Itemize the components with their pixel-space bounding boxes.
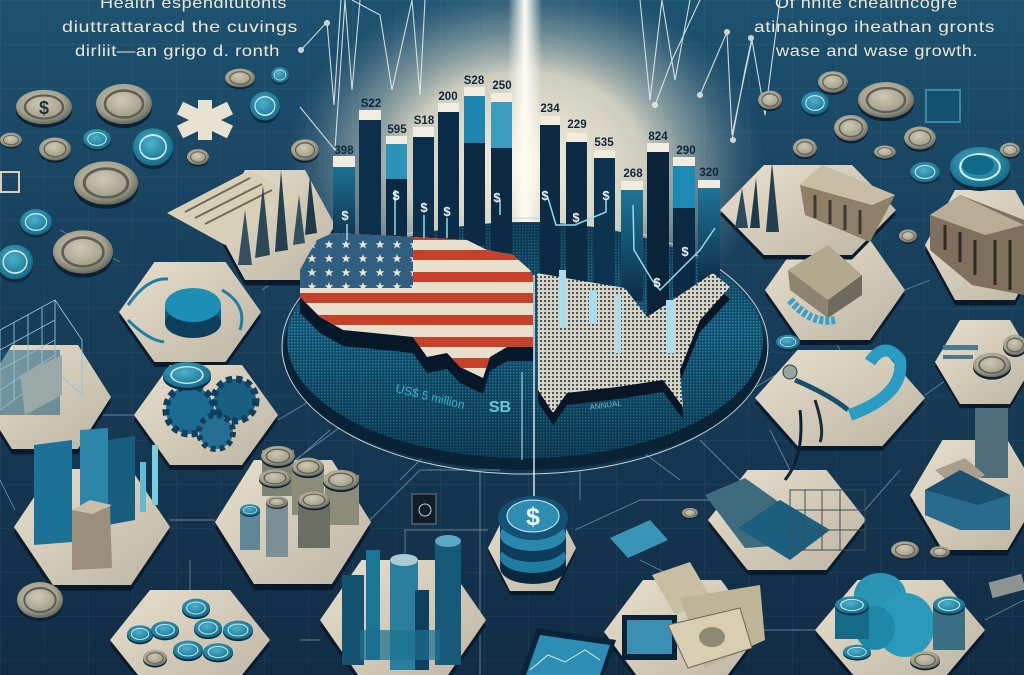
icon: ship and building	[705, 410, 865, 560]
icon: city block right	[925, 408, 1010, 530]
heading: left text block: dirliit—an grigo d. ronth	[75, 43, 280, 60]
icon: dollar coin stack: $	[526, 503, 540, 531]
icon: blue disc on card	[128, 279, 242, 342]
spike line charts above the bars	[298, 0, 780, 150]
trend lines with dollar marks	[341, 188, 715, 290]
bar chart: left group: S28	[464, 75, 485, 87]
disc base: US$ 5 million	[394, 381, 466, 412]
icon: laptop screen bottom	[520, 628, 616, 675]
bar chart: left group: S18	[414, 115, 435, 127]
bar chart: right group: 234	[540, 103, 560, 115]
central light glow	[285, 0, 765, 350]
trend lines with dollar marks: $	[341, 208, 349, 223]
icon: box on card	[788, 245, 862, 321]
bar chart: right group: 290	[676, 145, 696, 157]
bar chart: right group: 824	[648, 131, 668, 143]
heading: right text block: wase and wase growth.	[775, 43, 978, 60]
icon: blue gears	[163, 362, 256, 449]
bar chart: left group: 250	[492, 80, 512, 92]
icon: newspaper and spikes	[167, 170, 317, 265]
icon group: coins upper right	[758, 71, 1020, 351]
trend lines with dollar marks: $	[493, 190, 501, 205]
icon: bottom left coins	[17, 582, 253, 667]
heading: left text block: diuttrattaracd the cuvings	[62, 19, 298, 36]
icon: blue towers bottom centre	[342, 535, 461, 670]
panel: hexagon cards	[0, 165, 1024, 675]
disc base: ANNUAL	[589, 398, 623, 412]
bar chart: right group: 229	[567, 119, 587, 131]
bar chart: right group: 535	[594, 137, 614, 149]
bar chart: right group	[540, 103, 720, 318]
bar chart: left group	[333, 75, 512, 253]
icon: spikes and warehouse upper right	[735, 162, 895, 242]
icon group: coins upper left: $	[39, 98, 49, 118]
trend lines with dollar marks: $	[420, 200, 428, 215]
trend lines with dollar marks: $	[541, 188, 549, 203]
icon: coin stacks	[240, 446, 359, 557]
icon: glass towers	[34, 428, 158, 570]
bar chart: left group: 595	[387, 124, 407, 136]
icon: coins right card	[943, 335, 1024, 380]
trend lines with dollar marks: $	[653, 275, 661, 290]
disc base	[282, 218, 768, 474]
center vertical connector lines	[522, 275, 534, 500]
trend lines with dollar marks: $	[572, 210, 580, 225]
trend lines with dollar marks: $	[392, 188, 400, 203]
disc base: SB	[489, 399, 511, 416]
bar chart: left group: 398	[334, 145, 354, 157]
trend lines with dollar marks: $	[602, 188, 610, 203]
map: flag western half	[295, 225, 540, 394]
heading: left text block	[62, 0, 298, 60]
icon: wire cage	[0, 300, 82, 415]
trend lines with dollar marks: $	[443, 204, 451, 219]
circuit connector lines	[0, 230, 1024, 675]
bar chart: right group: 268	[623, 168, 643, 180]
icon group: coins upper left	[0, 67, 319, 283]
icon: blue paper	[412, 494, 698, 558]
icon: building right	[930, 195, 1024, 295]
heading: right text block	[754, 0, 995, 60]
icon: white asterisk	[180, 100, 230, 140]
icon: small coins lower right	[891, 541, 1024, 598]
map: dotted eastern half	[537, 270, 730, 425]
bar chart: left group: 200	[438, 91, 458, 103]
bar chart: right group: 320	[699, 167, 719, 179]
icon: dollar coin stack	[498, 496, 568, 584]
bar chart: left group: S22	[361, 98, 381, 110]
icon: blue heart and coin stacks	[835, 573, 965, 670]
icon: stethoscope	[783, 350, 900, 442]
heading: right text block: atinahingo iheathan gronts	[754, 19, 995, 36]
trend lines with dollar marks: $	[681, 244, 689, 259]
icon: monitor and cash	[622, 562, 765, 668]
